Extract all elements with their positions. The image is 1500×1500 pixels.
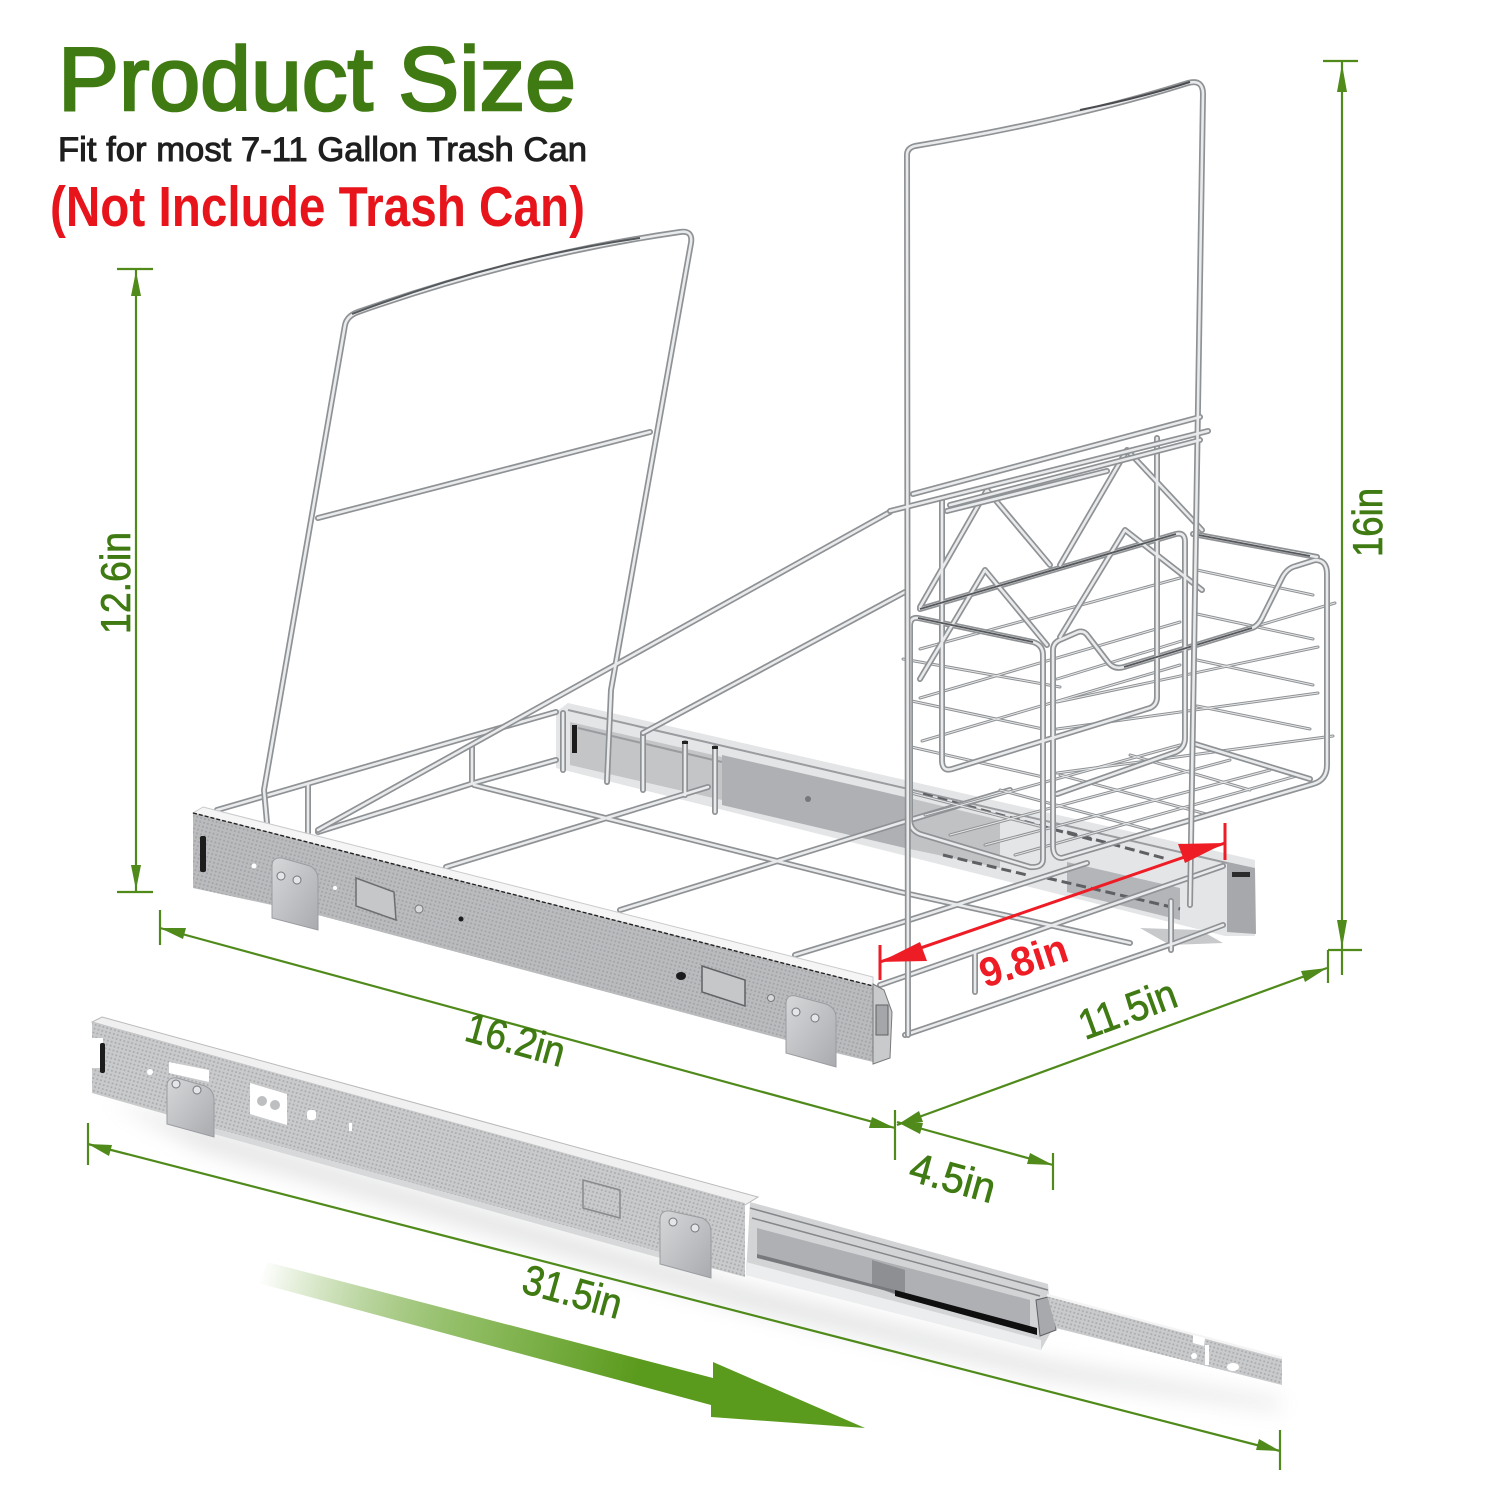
dimension: 11.5in depth: 11.5in [1072,970,1183,1048]
subtitle: Fit for most 7-11 Gallon Trash Can [58,131,587,169]
lower slide rail [92,1017,1282,1410]
dimension: 12.6in height [92,269,153,892]
dimension: 16in height: 16in [1344,488,1391,557]
dimension: 16.2in length: 16.2in [461,1003,570,1076]
dimension: 31.5in extended length: 31.5in [518,1255,627,1328]
rail outer body [92,1022,745,1277]
warning note: (Not Include Trash Can) [50,175,585,239]
title: Product Size [58,30,576,130]
dimension: 4.5in offset [897,1122,1053,1212]
bracket right [660,1211,711,1278]
back wire frame left [264,232,905,830]
product: pull-out rack [193,82,1335,1067]
rail shadow [110,1100,1280,1410]
rail end hardware [873,984,892,1064]
dimension: 11.5in depth [897,968,1327,1125]
dimension: 12.6in height: 12.6in [92,532,139,634]
dimension: 9.8in inner width (red) [880,823,1225,997]
floor wires [217,712,1223,1035]
telescoping middle section [746,1202,1056,1350]
extended inner rail [1047,1295,1282,1385]
rail top band [92,1017,758,1205]
dimension: 9.8in inner width (red): 9.8in [974,925,1073,997]
bracket: front rail right [786,996,836,1067]
dimension: 16.2in length [160,910,895,1160]
dimension: 31.5in extended length [88,1123,1280,1470]
tall wire frame right [890,82,1208,1035]
rail cutouts [92,1038,620,1218]
storage basket [903,438,1335,867]
bracket: front rail left [272,858,318,930]
rear slide rail [556,703,1256,945]
dimension: 16in height [1323,61,1391,983]
dimension: 4.5in offset: 4.5in [905,1143,1001,1212]
big direction arrow [258,1262,865,1428]
front slide rail [193,807,873,1062]
bracket left [167,1078,214,1137]
